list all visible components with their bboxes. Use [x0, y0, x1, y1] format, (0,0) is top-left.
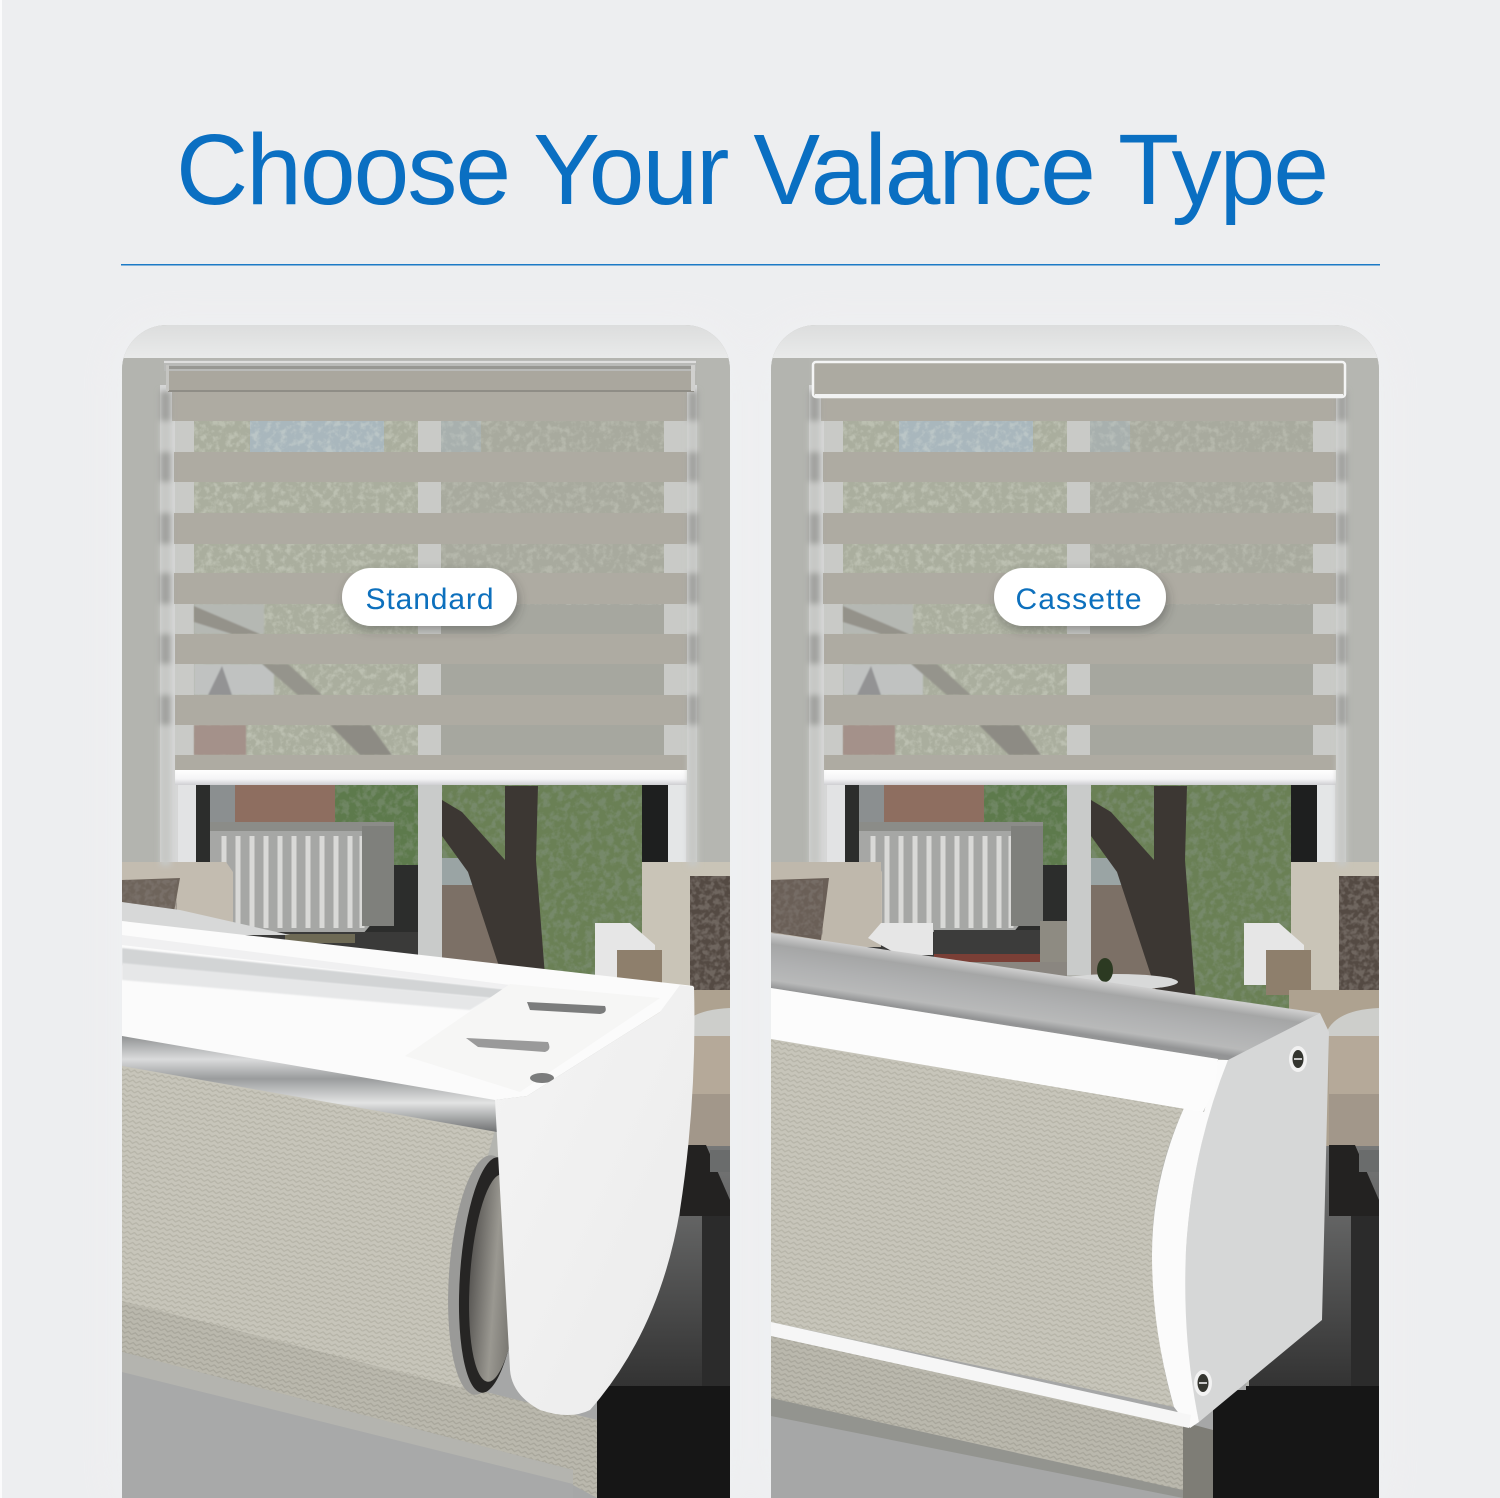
mullion extension: [1067, 960, 1091, 974]
room photo background: [122, 325, 730, 1498]
grey rug edge: [122, 1352, 573, 1484]
standard headrail: [164, 360, 696, 392]
label: Standard: [342, 568, 517, 626]
title divider: [121, 264, 1380, 266]
roller end with hub: [448, 1155, 509, 1395]
white bottom strip: [771, 1322, 1191, 1428]
sofa and pillow: [771, 862, 933, 955]
left edge highlight: [0, 0, 2, 1498]
main fabric face: [771, 1039, 1184, 1407]
panel: cassette valance: [771, 325, 1379, 1498]
end plate: [1185, 1013, 1329, 1422]
room photo background: [771, 325, 1379, 1498]
label: Cassette: Cassette: [1016, 583, 1142, 616]
lower fabric below roller: [122, 1300, 597, 1498]
cassette headrail: [813, 362, 1345, 398]
dark fabric side: [1183, 1422, 1213, 1498]
floor shadow: [1213, 1390, 1379, 1498]
white front strip: [771, 988, 1218, 1112]
zebra shade fabric: [160, 391, 698, 866]
white end cap: [495, 985, 694, 1415]
silver top rail: [771, 933, 1320, 1060]
fabric roller: [122, 1060, 495, 1390]
grey rug strip: [771, 1405, 1183, 1498]
grey rug strip: [557, 1480, 573, 1485]
stairs and red ledge: [934, 921, 1067, 976]
panel soft shadows: [118, 325, 1383, 1498]
white curved edge: [1152, 1060, 1228, 1428]
cassette cutaway detail: [771, 933, 1379, 1498]
title: Choose Your Valance Type: [176, 114, 1329, 226]
cushion wedge behind bracket: [122, 902, 290, 935]
small table with plant: [1070, 958, 1178, 988]
label: Standard: Standard: [366, 583, 494, 616]
white bracket top surface: [122, 921, 694, 1100]
label: Cassette: [994, 568, 1166, 626]
panel: standard valance: [122, 325, 730, 1498]
grey rug edge: [771, 1398, 1183, 1498]
lower fabric: [771, 1336, 1213, 1498]
zebra shade fabric: [809, 391, 1347, 866]
screw bottom: [1194, 1370, 1212, 1396]
screw top: [1289, 1046, 1307, 1072]
silver tubes: [122, 1035, 497, 1132]
